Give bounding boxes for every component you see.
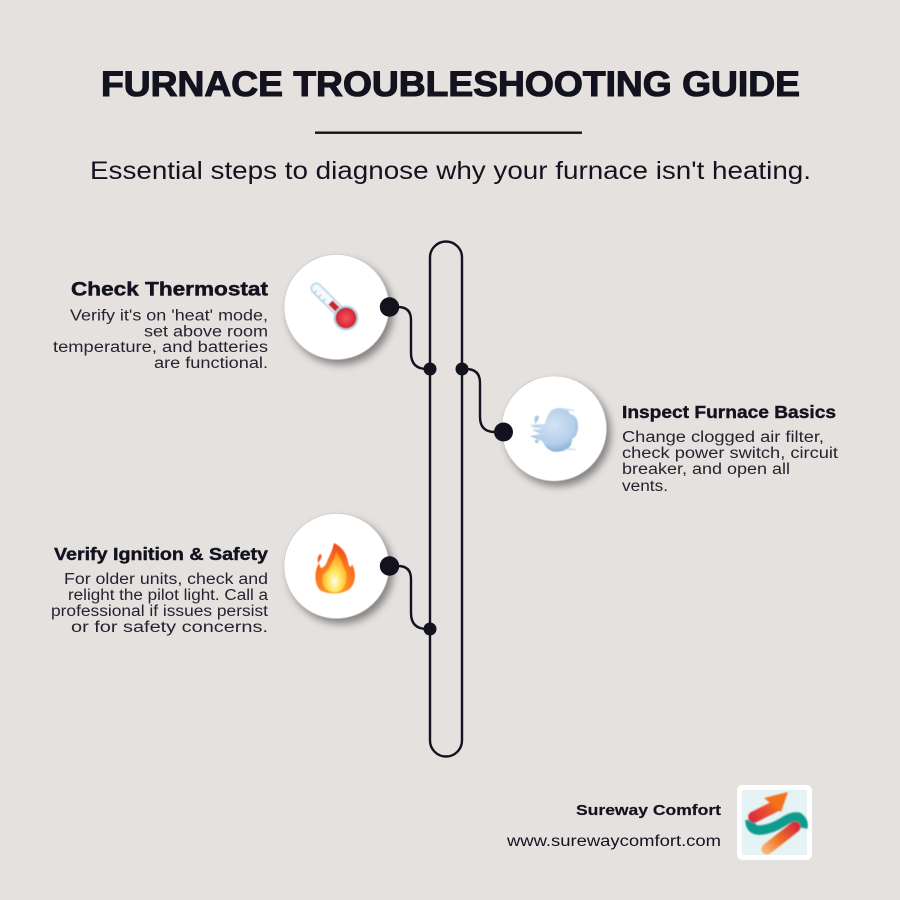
- logo: [737, 785, 812, 860]
- step: verify ignition and safety: [51, 514, 399, 636]
- central timeline rail: [430, 242, 462, 756]
- brand name: Sureway Comfort: [576, 802, 721, 819]
- text: ignition description: or for safety concerns.: [71, 619, 268, 636]
- heading: verify ignition and safety: Verify Ignition & Safety: [54, 544, 268, 564]
- footer brand: [506, 802, 721, 850]
- text: check thermostat description: are functional.: [154, 355, 268, 372]
- text: furnace basics description: check power switch, circuit: [622, 445, 839, 462]
- text: furnace basics description: [622, 429, 839, 495]
- step: check thermostat: [53, 254, 399, 372]
- connector node: furnace basics: [494, 422, 513, 442]
- heading: inspect furnace basics: Inspect Furnace Basics: [622, 402, 836, 422]
- icon circle: flame: [284, 514, 389, 618]
- heading: check thermostat: Check Thermostat: [71, 278, 269, 300]
- text: check thermostat description: temperature, and batteries: [53, 339, 268, 356]
- text: ignition description: [51, 571, 269, 636]
- text: furnace basics description: vents.: [622, 478, 668, 495]
- text: furnace basics description: breaker, and open all: [622, 461, 790, 478]
- title: FURNACE TROUBLESHOOTING GUIDE: [101, 65, 800, 104]
- connector node: ignition: [380, 556, 399, 576]
- subtitle: Essential steps to diagnose why your furnace isn't heating.: [90, 157, 811, 185]
- icon circle: wind puff: [502, 376, 606, 481]
- title divider: [315, 132, 582, 134]
- text: furnace basics description: Change clogged air filter,: [622, 429, 824, 446]
- connector: furnace basics to rail: [456, 362, 503, 432]
- text: ignition description: For older units, check and: [64, 571, 268, 588]
- connector: ignition to rail: [390, 566, 436, 636]
- text: ignition description: professional if issues persist: [51, 603, 269, 620]
- text: check thermostat description: set above room: [144, 324, 268, 340]
- text: check thermostat description: Verify it's on 'heat' mode,: [70, 308, 268, 324]
- step: inspect furnace basics: [494, 376, 839, 495]
- connector node: thermostat: [380, 297, 399, 317]
- website: www.surewaycomfort.com: [506, 833, 721, 850]
- text: check thermostat description: [53, 308, 268, 372]
- connector: thermostat to rail: [390, 307, 436, 376]
- icon circle: thermometer: [284, 254, 389, 360]
- text: ignition description: relight the pilot light. Call a: [68, 587, 268, 604]
